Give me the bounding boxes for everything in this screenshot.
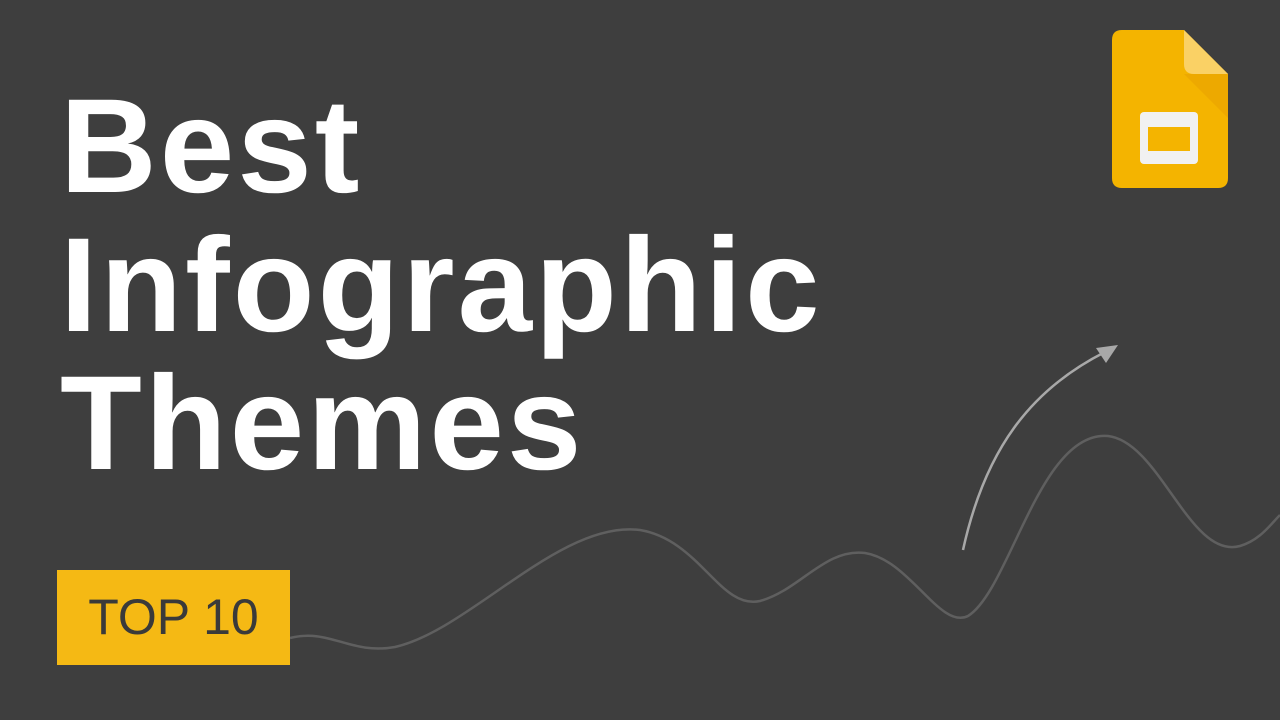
icon: Google Slides bbox=[1112, 30, 1228, 188]
wave line bbox=[290, 436, 1280, 649]
title: Best bbox=[60, 72, 362, 221]
arrow bbox=[963, 345, 1118, 550]
title: Themes bbox=[60, 349, 584, 498]
badge: TOP 10: TOP 10 bbox=[88, 589, 259, 645]
title bbox=[60, 72, 823, 498]
badge: TOP 10 bbox=[57, 570, 290, 665]
title: Infographic bbox=[60, 211, 823, 360]
